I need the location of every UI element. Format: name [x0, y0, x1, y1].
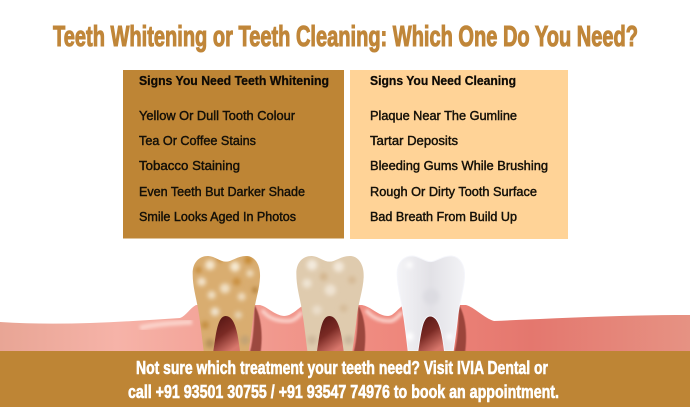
list: whitening signs: Yellow Or Dull Tooth Colour	[139, 109, 295, 123]
list: cleaning signs	[370, 109, 548, 224]
tooth: yellow stained	[193, 255, 262, 352]
footer text	[128, 358, 559, 402]
footer text: call +91 93501 30755 / +91 93547 74976 to book an appointment.	[128, 382, 559, 402]
list: cleaning signs: Bad Breath From Build Up	[370, 210, 517, 224]
list: cleaning signs: Plaque Near The Gumline	[370, 109, 517, 123]
illustration: gums and three teeth	[0, 255, 690, 352]
footer text: Not sure which treatment your teeth need? Visit IVIA Dental or	[136, 358, 548, 378]
panel: signs you need teeth whitening	[123, 70, 344, 238]
list: whitening signs: Even Teeth But Darker Shade	[139, 185, 305, 199]
list: cleaning signs: Tartar Deposits	[370, 134, 458, 148]
list: cleaning signs: Bleeding Gums While Brushing	[370, 159, 548, 173]
list: whitening signs: Tobacco Staining	[139, 159, 240, 173]
list: whitening signs	[139, 109, 305, 224]
tooth: white	[397, 256, 466, 352]
panel: signs you need cleaning	[350, 70, 568, 239]
tooth: beige	[296, 256, 365, 352]
list: whitening signs: Tea Or Coffee Stains	[139, 134, 256, 148]
heading: whitening: Signs You Need Teeth Whitening	[139, 74, 329, 88]
heading: cleaning: Signs You Need Cleaning	[370, 74, 516, 88]
gum band	[0, 305, 690, 352]
list: cleaning signs: Rough Or Dirty Tooth Surface	[370, 185, 537, 199]
footer band	[0, 351, 690, 407]
list: whitening signs: Smile Looks Aged In Photos	[139, 210, 296, 224]
